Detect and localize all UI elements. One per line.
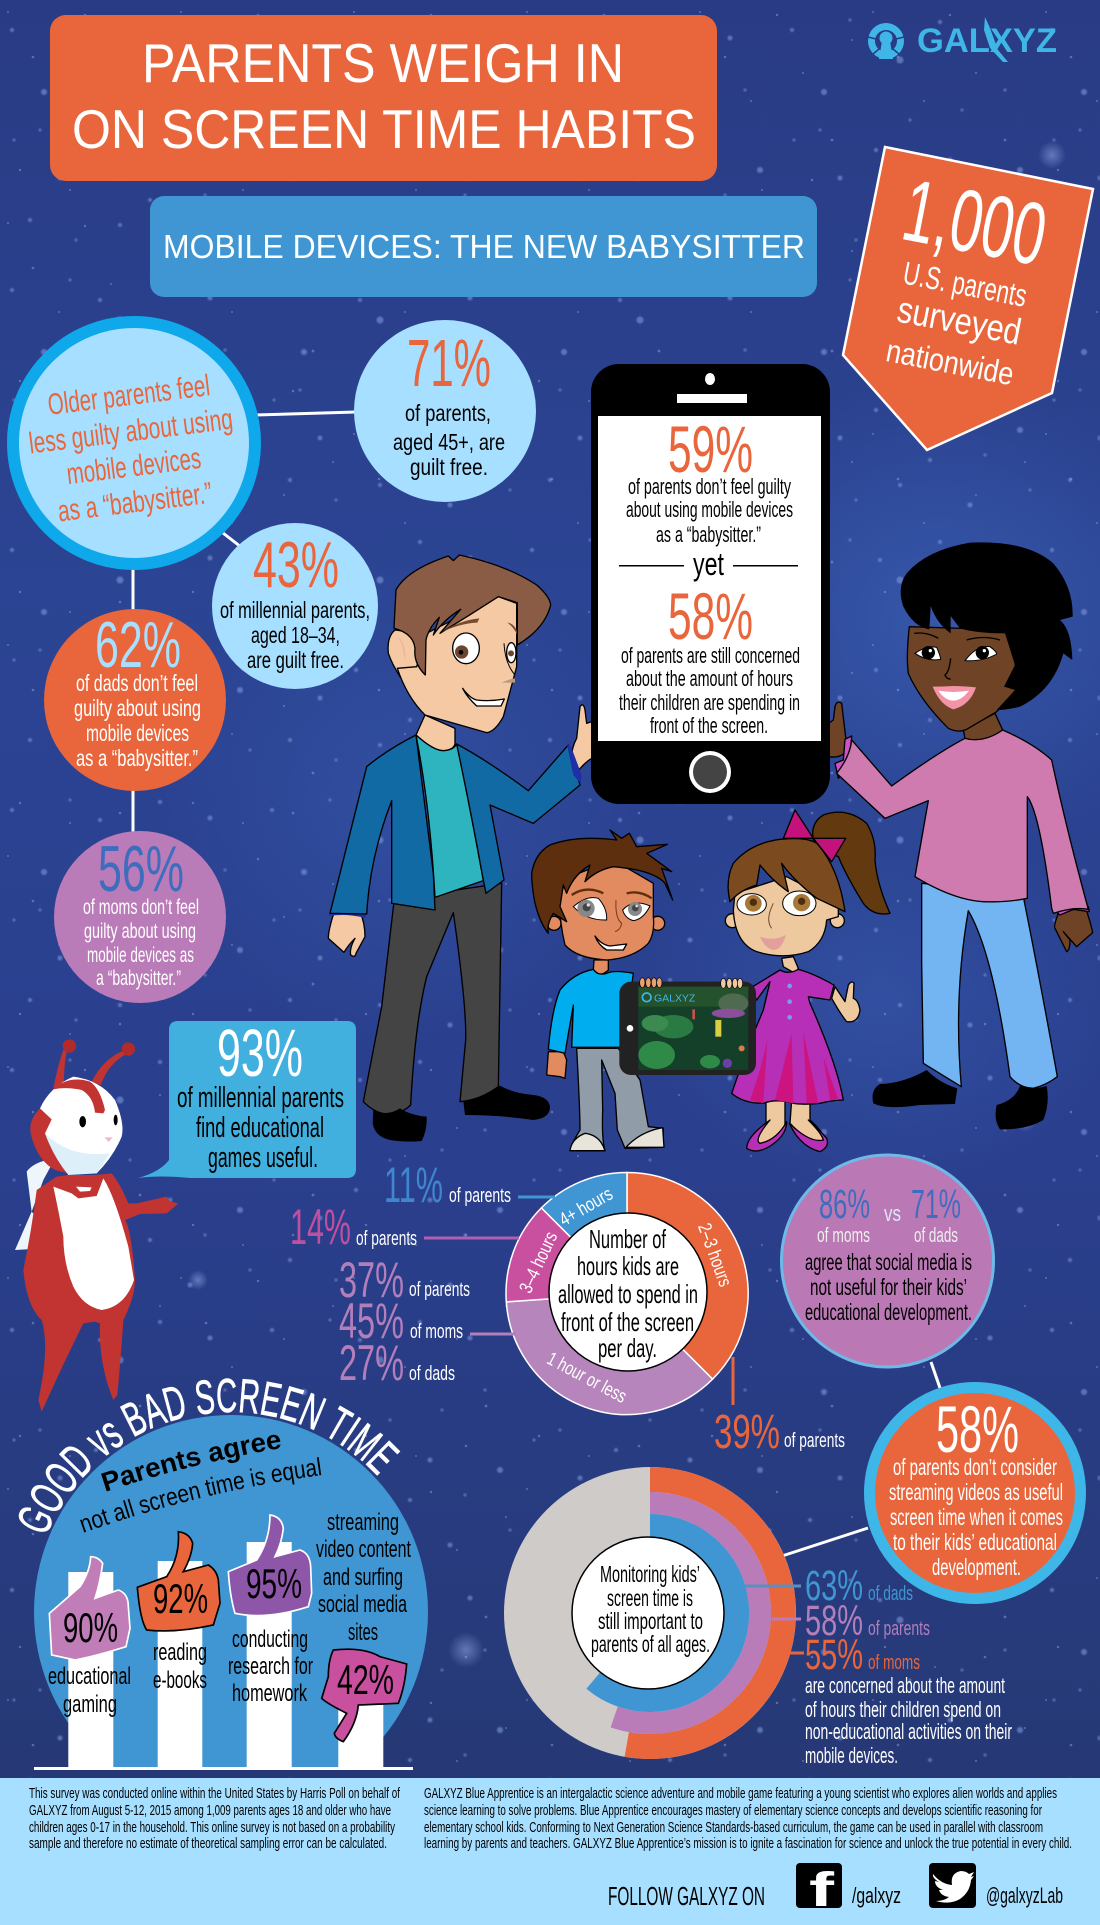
- illustration: two children with tablet: [532, 810, 890, 1152]
- circle: older parents: mobile devices: [65, 442, 203, 491]
- icon: facebook: f: [809, 1864, 836, 1917]
- circle: 43% millennial parents: [212, 523, 378, 689]
- thumb: 95% research for homework: conducting: [232, 1626, 308, 1653]
- thumb: 95% research for homework: homework: [232, 1680, 308, 1707]
- stat: 58%: front of the screen.: [650, 713, 768, 738]
- radial chart labels: of parents: [868, 1618, 930, 1640]
- label: 39% 2-3 hours: [714, 1357, 845, 1459]
- badge: 1,000 parents surveyed: [843, 147, 1093, 450]
- subtitle banner: MOBILE DEVICES: THE NEW BABYSITTER: [163, 228, 805, 265]
- circle: 62% of dads: as a “babysitter.”: [76, 745, 198, 771]
- label: 37% 45% 27% 1 hour or less: 37%: [339, 1252, 404, 1308]
- stat: 59%: of parents don’t feel guilty: [628, 474, 791, 499]
- circle: 71% of parents aged 45+: 71%: [407, 326, 491, 401]
- circle: 71% of parents aged 45+: guilt free.: [410, 454, 488, 480]
- stat: 59%: [626, 412, 793, 547]
- circle: social media 86% vs 71%: agree that social media is: [805, 1249, 972, 1275]
- thumb: 95% research for homework: 95%: [246, 1560, 302, 1607]
- circle: social media 86% vs 71%: 86%: [819, 1181, 870, 1227]
- circle: older parents: Older parents feel: [46, 369, 212, 422]
- donut chart: hours per day: 2–3 hours: [693, 1221, 735, 1290]
- label: 14% 3-4 hours: of parents: [356, 1228, 417, 1250]
- radial chart labels: 63%: [805, 1562, 863, 1610]
- tablet: GALXYZ: [654, 993, 695, 1004]
- tablet: [619, 978, 756, 1075]
- label: 11% 4+ hours: of parents: [449, 1185, 511, 1207]
- circle: older parents: less guilty about using: [27, 403, 235, 460]
- circle: 62% of dads: of dads don’t feel: [76, 670, 198, 696]
- thumb: 95% research for homework: [228, 1515, 313, 1707]
- label: 37% 45% 27% 1 hour or less: of parents: [409, 1279, 470, 1301]
- thumb: 90% educational gaming: educational: [48, 1663, 131, 1690]
- circle: 43% millennial parents: are guilt free.: [247, 647, 344, 673]
- stat: 58%: about the amount of hours: [626, 666, 793, 691]
- thumb down: 42% streaming and social media: 42%: [337, 1656, 394, 1703]
- title banner: [50, 15, 717, 181]
- label: 11% 4+ hours: 11%: [384, 1157, 443, 1213]
- radial chart labels: [745, 1562, 1012, 1768]
- circle: social media 86% vs 71%: not useful for their kids’: [810, 1274, 967, 1300]
- circle: 43% millennial parents: 43%: [253, 528, 339, 601]
- circle: 71% of parents aged 45+: [354, 320, 536, 502]
- thumb: 90% educational gaming: [48, 1557, 131, 1718]
- connector lines: guilt circles: [133, 412, 356, 834]
- text: about GALXYZ Blue Apprentice: [424, 1785, 1072, 1852]
- circle: 62% of dads: 62%: [95, 608, 181, 681]
- label: 37% 45% 27% 1 hour or less: of moms: [410, 1321, 463, 1343]
- text: survey methodology: children ages 0-17 in the household. This online survey is not based on a probability: [29, 1819, 395, 1836]
- donut chart: hours per day: hours kids are: [577, 1251, 679, 1281]
- donut chart: hours per day: allowed to spend in: [558, 1279, 698, 1309]
- thumb down: 42% streaming and social media: social media: [318, 1591, 407, 1618]
- circle: older parents: [13, 322, 255, 564]
- thumb: 90% educational gaming: gaming: [63, 1691, 117, 1718]
- divider: yet: yet: [693, 546, 724, 582]
- donut chart: hours per day: Number of: [589, 1224, 666, 1254]
- circle: 56% of moms: of moms don’t feel: [83, 896, 199, 919]
- subtitle banner: [150, 196, 817, 297]
- circle: 56% of moms: guilty about using: [84, 920, 196, 943]
- radial chart: monitoring screen time: screen time is: [607, 1585, 693, 1611]
- circle: 71% of parents aged 45+: aged 45+, are: [393, 429, 505, 455]
- stat: 59%: as a “babysitter.”: [656, 522, 761, 547]
- thumb: 90% educational gaming: 90%: [63, 1604, 118, 1651]
- thumb down: 42% streaming and social media: streaming: [327, 1509, 399, 1536]
- speech bubble: 93%: find educational: [196, 1112, 324, 1144]
- illustration: alien mascot: [15, 1039, 178, 1412]
- illustration: father: [328, 555, 592, 1142]
- radial chart labels: 58%: [805, 1597, 863, 1645]
- panel: good vs bad screen time: [18, 1378, 428, 1770]
- label: 39% 2-3 hours: of parents: [784, 1430, 845, 1452]
- speech bubble: 93%: 93%: [217, 1016, 303, 1091]
- badge: 1,000 parents surveyed: surveyed: [894, 289, 1025, 353]
- circle: 58% streaming videos: development.: [932, 1554, 1021, 1580]
- circle: 58% streaming videos: 58%: [936, 1392, 1019, 1466]
- circle: social media 86% vs 71%: of dads: [914, 1225, 958, 1247]
- circle: social media 86% vs 71%: of moms: [817, 1225, 870, 1247]
- circle: 62% of dads: guilty about using: [74, 695, 201, 721]
- thumb: 95% research for homework: research for: [228, 1653, 313, 1680]
- circle: social media 86% vs 71%: vs: [884, 1201, 901, 1226]
- circle: 62% of dads: [44, 608, 226, 791]
- text: survey methodology: [29, 1785, 401, 1852]
- donut chart: hours per day: per day.: [598, 1333, 657, 1363]
- circle: 56% of moms: [54, 831, 226, 1003]
- circle: social media 86% vs 71%: 71%: [911, 1181, 961, 1227]
- circle: social media 86% vs 71%: [782, 1155, 994, 1367]
- thumb: 92% reading e-books: reading: [153, 1639, 207, 1666]
- illustration: mother: [829, 542, 1093, 1129]
- thumb down: 42% streaming and social media: and surfing: [323, 1564, 403, 1591]
- thumb: 92% reading e-books: 92%: [153, 1575, 208, 1622]
- thumb down: 42% streaming and social media: sites: [348, 1619, 378, 1646]
- label: 37% 45% 27% 1 hour or less: [339, 1252, 516, 1391]
- thumb down: 42% streaming and social media: [316, 1509, 411, 1742]
- icon: twitter: [929, 1863, 976, 1908]
- radial chart labels: 55%: [805, 1631, 863, 1679]
- circle: social media 86% vs 71%: educational development.: [805, 1299, 972, 1325]
- logo: GALXYZ: [868, 17, 1057, 62]
- donut chart: hours per day: 1 hour or less: [543, 1348, 630, 1408]
- radial chart: monitoring screen time: [504, 1467, 796, 1759]
- illustration: phone with survey stats: [591, 364, 830, 804]
- badge: 1,000 parents surveyed: U.S. parents: [900, 255, 1030, 314]
- connector lines: social media circles: [782, 1362, 940, 1556]
- label: 37% 45% 27% 1 hour or less: 45%: [339, 1293, 404, 1349]
- stat: 58%: [619, 579, 800, 738]
- circle: 71% of parents aged 45+: of parents,: [405, 400, 491, 426]
- stat: 58%: of parents are still concerned: [621, 643, 800, 668]
- thumb down: 42% streaming and social media: video content: [316, 1536, 411, 1563]
- radial chart labels: mobile devices.: [805, 1743, 898, 1768]
- stat: 58%: their children are spending in: [619, 690, 800, 715]
- circle: 43% millennial parents: of millennial parents,: [220, 597, 370, 623]
- speech bubble: 93%: games useful.: [208, 1142, 318, 1174]
- label: 14% 3-4 hours: [290, 1199, 519, 1255]
- stat: 59%: 59%: [668, 412, 753, 486]
- speech bubble: 93%: [138, 1016, 356, 1178]
- stat: 59%: about using mobile devices: [626, 497, 793, 522]
- title banner: PARENTS WEIGH IN: [142, 32, 624, 94]
- text: facebook handle: /galxyz: [852, 1883, 901, 1908]
- circle: 56% of moms: a “babysitter.”: [96, 967, 181, 990]
- donut chart: hours per day: front of the screen: [561, 1307, 694, 1337]
- heading: good vs bad screen time: GOOD vs BAD SCREEN TIME: [18, 1378, 400, 1532]
- label: 37% 45% 27% 1 hour or less: of dads: [409, 1363, 455, 1385]
- text: survey methodology: GALXYZ from August 5-12, 2015 among 1,009 parents ages 18 and older who have: [29, 1802, 391, 1819]
- label: 14% 3-4 hours: 14%: [290, 1199, 351, 1255]
- thumb: 92% reading e-books: e-books: [153, 1667, 207, 1694]
- panel: footer: [0, 1778, 1100, 1925]
- bar chart: screen time bars: [34, 1542, 413, 1770]
- label: 37% 45% 27% 1 hour or less: 27%: [339, 1335, 404, 1391]
- donut chart: hours per day: [506, 1172, 748, 1415]
- stat: 58%: 58%: [668, 579, 753, 653]
- text: follow galxyz on: FOLLOW GALXYZ ON: [608, 1881, 765, 1911]
- circle: 56% of moms: mobile devices as: [87, 944, 194, 967]
- icon: facebook: [796, 1863, 842, 1917]
- circle: 56% of moms: 56%: [98, 832, 184, 905]
- label: 39% 2-3 hours: 39%: [714, 1406, 780, 1459]
- subheading: parents agree: Parents agree: [101, 1434, 281, 1492]
- text: survey methodology: sample and therefore no estimate of theoretical sampling error can be calculated.: [29, 1835, 387, 1852]
- speech bubble: 93%: of millennial parents: [177, 1082, 344, 1114]
- radial chart labels: of moms: [868, 1652, 920, 1674]
- donut chart: hours per day: 3–4 hours: [516, 1229, 562, 1297]
- donut chart: hours per day: 4+ hours: [556, 1184, 617, 1231]
- radial chart: monitoring screen time: Monitoring kids’: [600, 1561, 700, 1587]
- circle: 43% millennial parents: aged 18–34,: [251, 622, 340, 648]
- subheading: parents agree: not all screen time is equal: [80, 1457, 322, 1532]
- circle: older parents: as a “babysitter.”: [56, 477, 214, 528]
- logo: GALXYZ: GALXYZ: [917, 22, 1057, 60]
- text: survey methodology: This survey was conducted online within the United States by Harris Poll on behalf of: [29, 1785, 401, 1802]
- radial chart labels: of dads: [868, 1583, 913, 1605]
- badge: 1,000 parents surveyed: nationwide: [883, 332, 1017, 392]
- title banner: ON SCREEN TIME HABITS: [72, 98, 696, 160]
- circle: 58% streaming videos: [870, 1388, 1080, 1598]
- radial chart: monitoring screen time: parents of all ages.: [591, 1631, 710, 1657]
- radial chart: monitoring screen time: still important to: [598, 1608, 703, 1634]
- label: 11% 4+ hours: [384, 1157, 555, 1213]
- thumb: 92% reading e-books: [137, 1532, 220, 1694]
- circle: 62% of dads: mobile devices: [86, 720, 189, 746]
